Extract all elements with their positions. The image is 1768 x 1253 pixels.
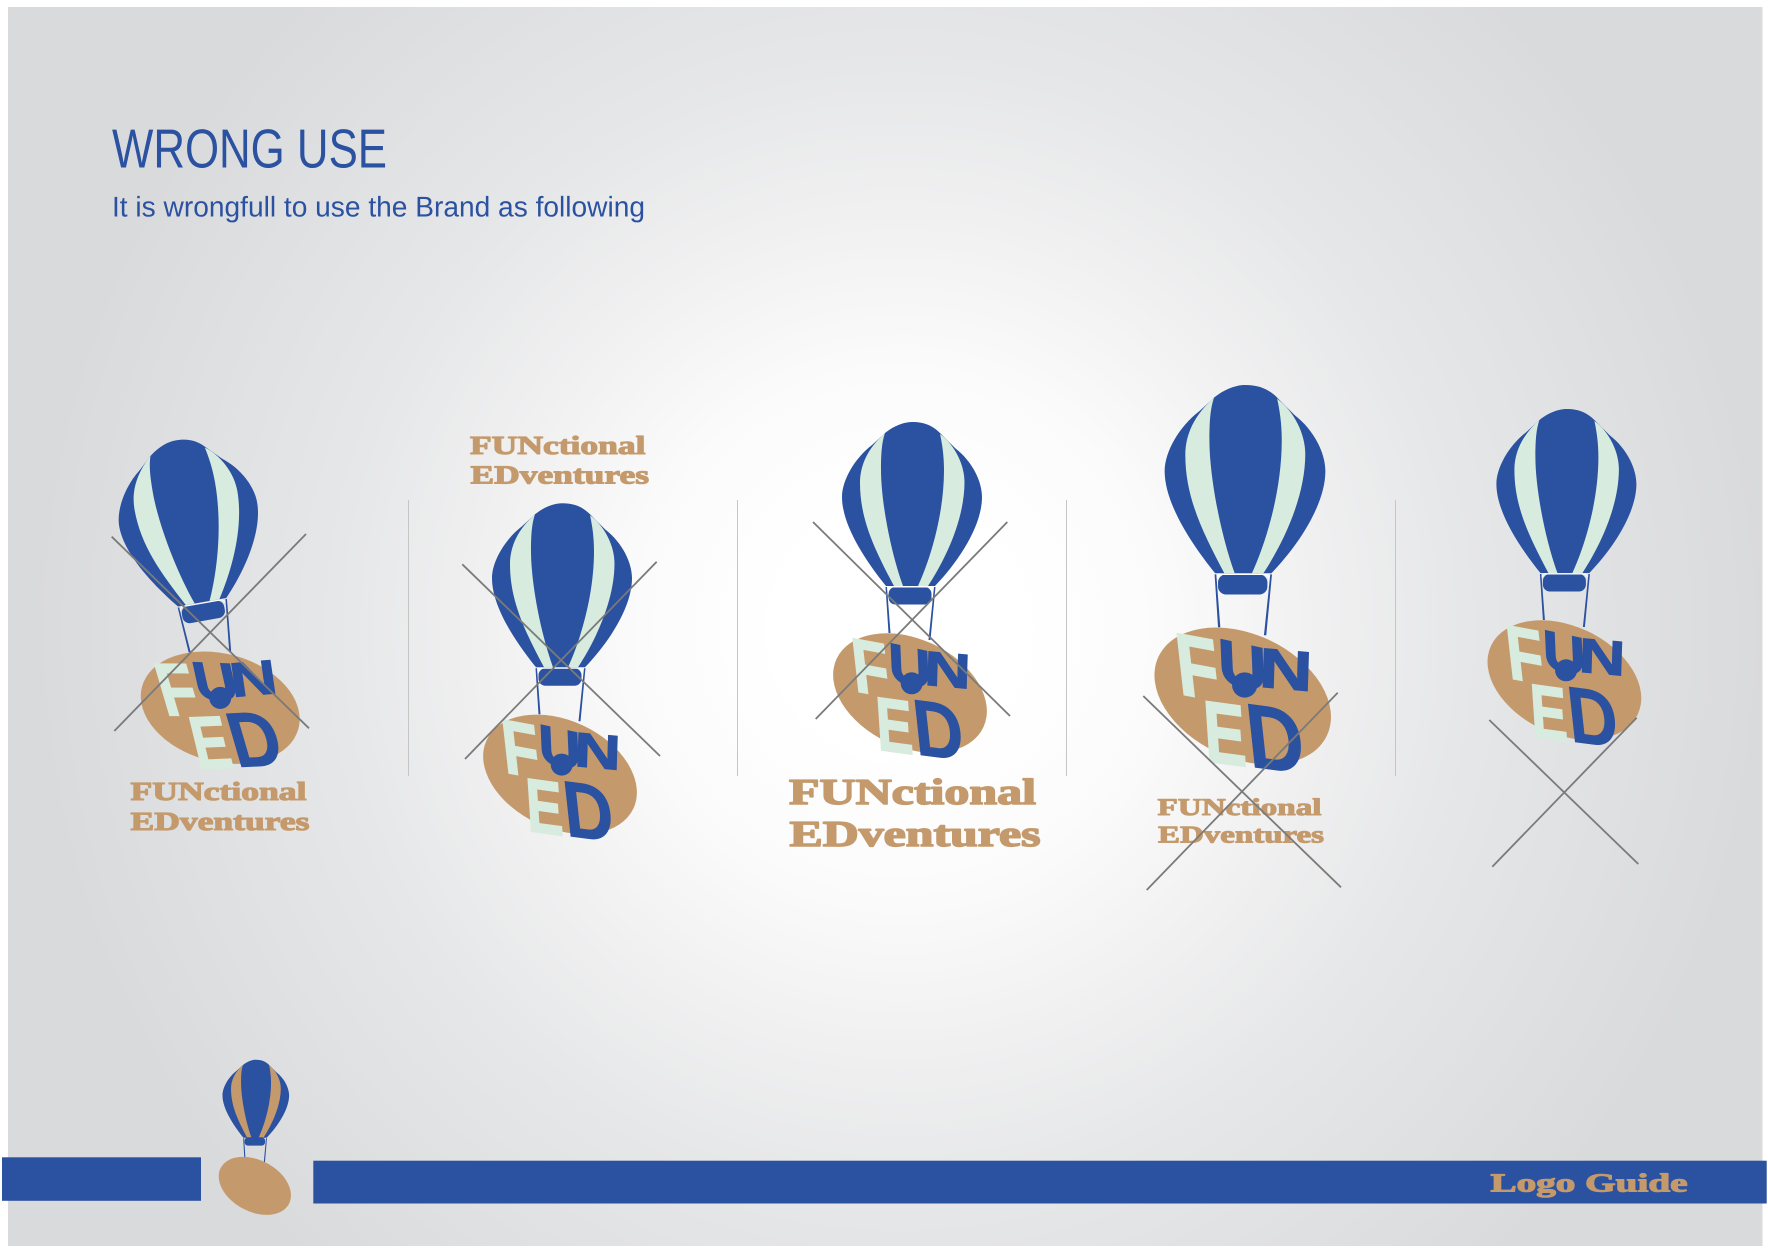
balloon and mark: E [184, 708, 242, 791]
cross mark [1489, 718, 1638, 867]
balloon and mark: N [227, 655, 281, 711]
wordmark [1158, 795, 1324, 849]
logo example 1: tilted logo [78, 424, 331, 836]
logo example 2: wordmark above the logo [462, 431, 660, 866]
cross mark [462, 562, 660, 759]
wordmark: EDventures [130, 807, 310, 836]
balloon and mark [464, 503, 656, 866]
balloon and mark: F [1172, 623, 1225, 728]
balloon and mark: U [1217, 632, 1269, 712]
cross mark [1143, 693, 1341, 890]
wordmark [470, 431, 649, 489]
balloon and mark: N [1578, 633, 1626, 690]
balloon and mark: D [219, 703, 294, 790]
balloon and mark: N [923, 646, 972, 703]
footer bar right [313, 1161, 1767, 1204]
balloon and mark: F [848, 629, 894, 721]
wordmark: FUNctional [789, 771, 1036, 812]
balloon and mark: F [148, 656, 210, 738]
wordmark: FUNctional [1158, 795, 1322, 821]
subtitle: It is wrongfull to use the Brand as following [112, 192, 645, 224]
wordmark: FUNctional [470, 431, 646, 460]
balloon and mark: E [874, 689, 918, 777]
footer balloon icon [209, 1060, 301, 1227]
balloon and mark: E [1201, 691, 1251, 793]
logo example 5: logo without wordmark [1468, 409, 1661, 867]
balloon and mark: N [1258, 642, 1314, 708]
balloon and mark: U [188, 656, 245, 717]
balloon and mark: E [1528, 676, 1572, 764]
balloon and mark: U [537, 718, 583, 788]
wordmark [789, 771, 1040, 854]
balloon and mark: N [573, 727, 622, 785]
cross mark [112, 534, 309, 731]
wordmark: EDventures [790, 813, 1040, 854]
balloon and mark: F [498, 711, 544, 802]
cross mark [813, 522, 1010, 719]
balloon and mark: D [1242, 693, 1310, 802]
logo example 3: oversized wordmark [789, 422, 1040, 854]
balloon and mark: U [1542, 624, 1587, 694]
logo example 4: oversized balloon [1132, 385, 1353, 890]
balloon and mark: D [1564, 677, 1623, 772]
balloon and mark: D [909, 690, 969, 785]
balloon and mark: U [887, 637, 933, 707]
footer label: Logo Guide [1490, 1168, 1688, 1198]
wordmark: EDventures [1158, 823, 1324, 849]
balloon and mark [1468, 409, 1661, 772]
wordmark: FUNctional [130, 777, 306, 806]
wordmark [130, 777, 310, 836]
balloon and mark [1132, 385, 1353, 802]
balloon and mark [814, 422, 1006, 785]
balloon and mark: E [524, 770, 568, 859]
title: WRONG USE [112, 118, 387, 180]
wordmark: EDventures [470, 460, 649, 489]
balloon and mark [78, 424, 331, 815]
footer bar left [2, 1157, 201, 1201]
balloon and mark: D [559, 772, 619, 866]
balloon and mark: F [1502, 616, 1549, 708]
